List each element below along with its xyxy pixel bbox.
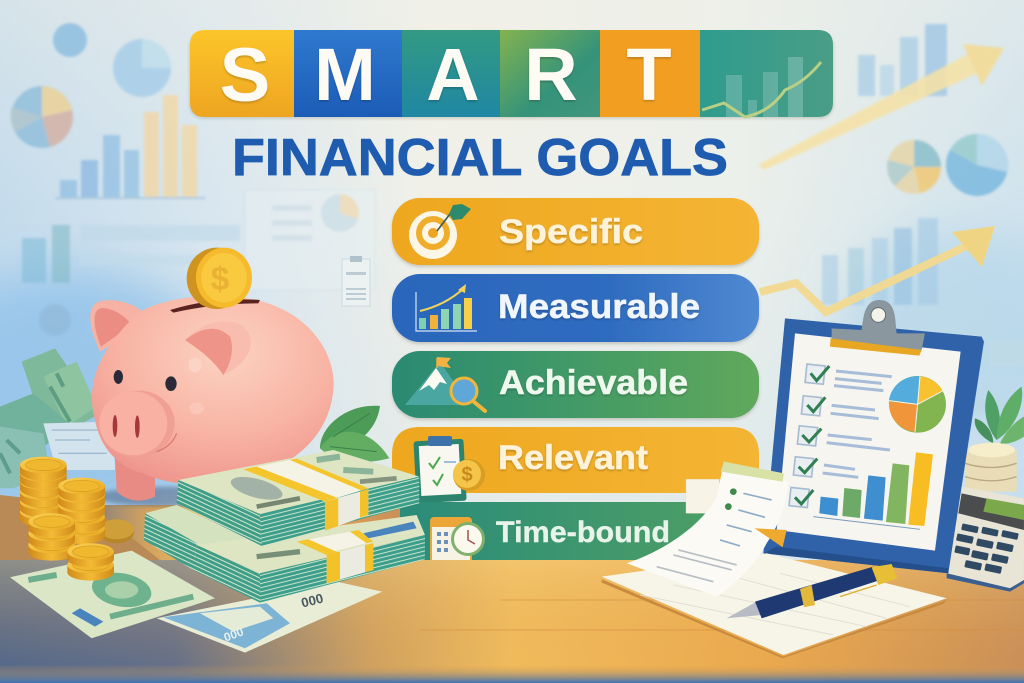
faded charts lower right	[822, 218, 1024, 412]
title banner: SMART	[189, 30, 834, 119]
pill: Achievable: Achievable	[499, 364, 688, 402]
background cash and receipt left	[0, 348, 115, 488]
leaves behind pig	[320, 406, 389, 462]
pig body	[92, 296, 334, 485]
coin stack three	[28, 513, 75, 561]
icon: target with dart	[409, 204, 471, 259]
clipboard paper	[777, 333, 961, 551]
icon: mountain flag and magnifier	[405, 357, 485, 411]
banknote left	[10, 551, 215, 638]
icon: bar chart with rising arrow	[416, 284, 477, 331]
curled receipt	[627, 462, 788, 597]
title banner: SMART: S	[220, 33, 270, 118]
pill: Measurable	[392, 274, 759, 342]
coin stacks	[20, 457, 134, 581]
pill: Achievable	[392, 351, 759, 418]
arrow: upper growth arrow	[758, 44, 1004, 170]
checklist	[789, 364, 892, 508]
upper cash stack	[177, 450, 419, 546]
faded dashboard panel	[22, 190, 375, 336]
loose banknotes	[10, 551, 382, 653]
pig left ear	[90, 300, 147, 352]
lower cash stack	[144, 505, 425, 603]
faded charts upper right	[858, 24, 1008, 196]
title banner: SMART: M	[314, 33, 376, 116]
pill: Measurable: Measurable	[498, 288, 700, 326]
pill: Relevant	[392, 427, 759, 503]
coin stack four	[67, 543, 114, 581]
arrow: lower growth arrow	[760, 226, 995, 312]
notepad	[602, 553, 947, 658]
gold coin	[187, 248, 252, 309]
pill: Specific: Specific	[499, 213, 643, 251]
cash stacks	[144, 450, 425, 603]
pig snout	[96, 386, 179, 462]
title banner: SMART: R	[524, 33, 578, 116]
icon: checklist with dollar coin: $	[461, 464, 473, 486]
pill: Relevant: Relevant	[498, 439, 648, 477]
pig right ear	[185, 321, 251, 375]
pale coin stack right	[965, 443, 1017, 492]
clipboard clip	[830, 300, 925, 356]
flat coin	[99, 519, 134, 543]
title banner: SMART: A	[426, 33, 480, 116]
clipboard pie chart	[889, 376, 946, 433]
pig leg	[115, 457, 155, 501]
icon: calendar with clock	[431, 518, 484, 564]
coin slot	[170, 299, 260, 313]
icon: faded document	[342, 256, 370, 306]
plant behind clipboard	[975, 387, 1024, 444]
icon: banner mini chart	[702, 57, 821, 117]
loose note behind receipt	[686, 479, 719, 513]
pill: Time-bound: Time-bound	[496, 516, 670, 549]
coin stack two	[58, 478, 105, 544]
coin stack one	[20, 457, 67, 527]
gold coin: $	[211, 261, 230, 298]
pen	[727, 564, 897, 618]
icon: orange pointer	[755, 528, 787, 547]
pill: Specific	[392, 198, 759, 265]
notepad and receipt	[602, 462, 947, 658]
faded charts upper left	[11, 23, 205, 199]
calculator	[947, 487, 1024, 592]
heading: Financial Goals: FINANCIAL GOALS	[232, 129, 728, 187]
title banner: SMART: T	[626, 33, 672, 116]
clipboard	[763, 300, 984, 573]
clipboard bar chart	[813, 452, 933, 529]
banknote right	[157, 582, 382, 653]
pill: Time-bound	[380, 502, 717, 568]
pig eyes	[114, 370, 177, 391]
banknote right: 000	[300, 591, 325, 611]
icon: checklist with dollar coin	[413, 436, 485, 503]
piggy bank	[90, 248, 334, 507]
banknote right: 000	[222, 624, 246, 645]
table surface	[0, 495, 1024, 683]
